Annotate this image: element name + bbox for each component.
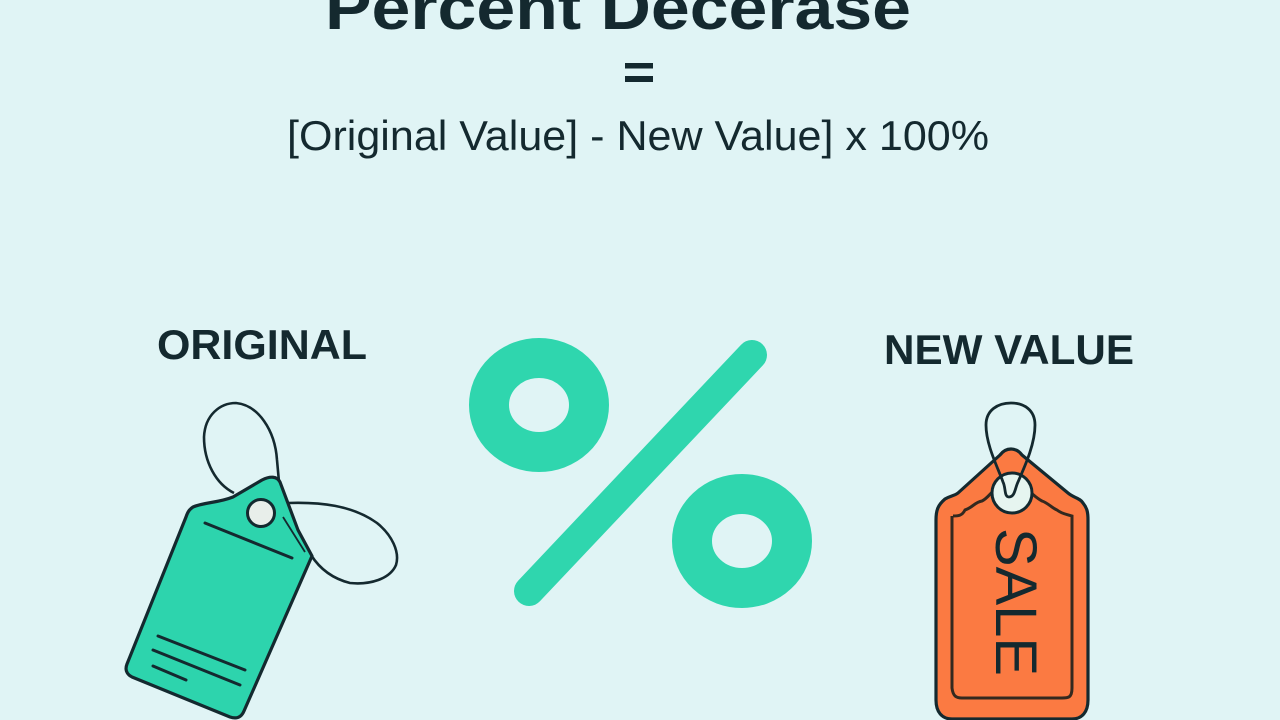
sale text: SALE (983, 528, 1048, 676)
label: original: ORIGINAL (157, 321, 367, 368)
icon: sale price tag (936, 403, 1088, 719)
string loop upper (204, 403, 279, 493)
string through (283, 517, 305, 552)
hole (992, 473, 1032, 513)
tag body (126, 477, 312, 718)
label: new value: NEW VALUE (884, 326, 1134, 373)
string loop right (288, 503, 397, 583)
hole (248, 500, 274, 526)
icon: percent symbol (489, 355, 792, 591)
inner border (952, 489, 1072, 698)
string loop (986, 403, 1035, 497)
formula: [Original Value] - New Value] x 100% (287, 112, 989, 159)
equals sign (625, 63, 653, 82)
icon: original price tag (126, 403, 397, 718)
tag body (936, 449, 1088, 719)
detail lines (153, 636, 245, 685)
top line (205, 523, 292, 558)
